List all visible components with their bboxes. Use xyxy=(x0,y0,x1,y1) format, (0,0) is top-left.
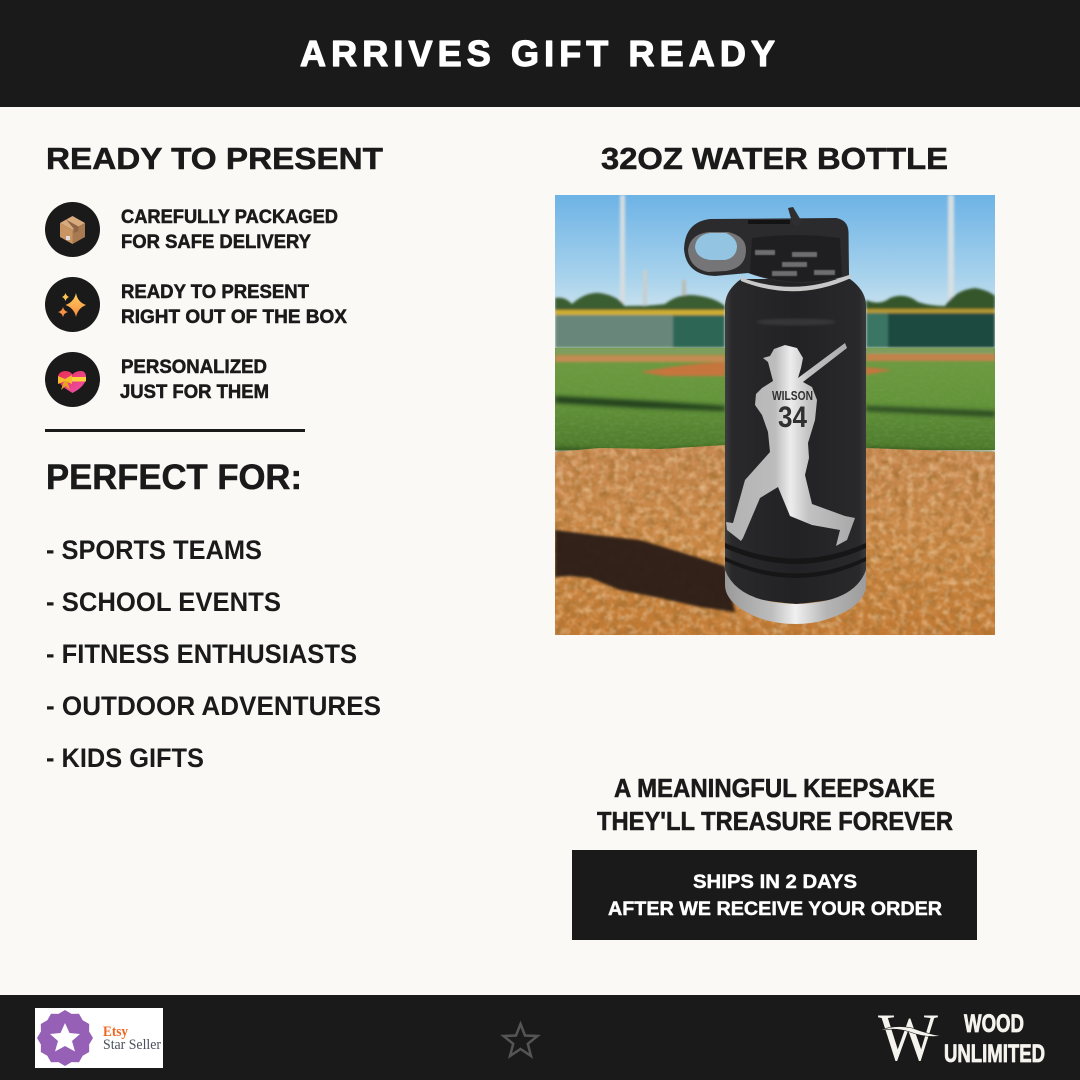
shipping callout: AFTER WE RECEIVE YOUR ORDER xyxy=(608,898,942,920)
icon: gift heart xyxy=(45,352,100,407)
jersey name: WILSON xyxy=(772,389,813,403)
header band xyxy=(0,0,1080,107)
icon: outline star xyxy=(504,1024,538,1056)
bottle body xyxy=(725,279,866,604)
list: audiences: - SPORTS TEAMS xyxy=(46,535,262,565)
lid with carry loop xyxy=(684,207,849,283)
feature: carefully packaged xyxy=(45,202,338,257)
tagline: THEY'LL TREASURE FOREVER xyxy=(597,808,953,836)
text: ready to present: RIGHT OUT OF THE BOX xyxy=(121,306,347,328)
list: audiences: - OUTDOOR ADVENTURES xyxy=(46,691,381,721)
feature: ready to present xyxy=(45,277,347,332)
icon: package xyxy=(45,202,100,257)
badge: etsy star seller xyxy=(35,1008,163,1068)
heading: ready to present: READY TO PRESENT xyxy=(46,141,383,176)
wordmark: UNLIMITED xyxy=(944,1040,1045,1068)
badge: etsy star seller: Star Seller xyxy=(103,1037,161,1053)
tagline: A MEANINGFUL KEEPSAKE xyxy=(614,775,935,803)
engraving: baseball player silhouette xyxy=(726,343,855,546)
text: ready to present: READY TO PRESENT xyxy=(121,281,309,303)
photo background: field xyxy=(555,195,995,635)
product photo: engraved bottle on baseball field xyxy=(555,195,995,635)
text: carefully packaged: CAREFULLY PACKAGED xyxy=(121,206,338,228)
list: audiences: - SCHOOL EVENTS xyxy=(46,587,281,617)
text: carefully packaged: FOR SAFE DELIVERY xyxy=(121,231,311,253)
steel base xyxy=(725,570,866,624)
heading: 32oz water bottle: 32OZ WATER BOTTLE xyxy=(601,141,948,176)
steel neck ring xyxy=(740,274,851,291)
wordmark: WOOD xyxy=(964,1010,1024,1038)
shipping callout: SHIPS IN 2 DAYS xyxy=(693,871,857,893)
icon: sparkles xyxy=(45,277,100,332)
list: audiences: - FITNESS ENTHUSIASTS xyxy=(46,639,357,669)
title: ARRIVES GIFT READY xyxy=(300,33,775,74)
panel: perfect for xyxy=(46,458,389,773)
logo: wood unlimited xyxy=(878,999,1045,1075)
footer band xyxy=(0,995,1080,1080)
heading: perfect for: PERFECT FOR: xyxy=(46,458,302,497)
text: personalized: PERSONALIZED xyxy=(121,356,267,378)
bottle xyxy=(684,207,866,624)
list: audiences: - KIDS GIFTS xyxy=(46,743,204,773)
feature: personalized xyxy=(45,352,269,407)
text: personalized: JUST FOR THEM xyxy=(120,381,269,403)
badge: etsy star seller: Etsy xyxy=(103,1024,128,1040)
logo mark: W: W xyxy=(878,999,939,1075)
panel: ready to present xyxy=(45,141,383,407)
shipping callout xyxy=(572,850,977,940)
jersey number: 34 xyxy=(778,401,807,434)
